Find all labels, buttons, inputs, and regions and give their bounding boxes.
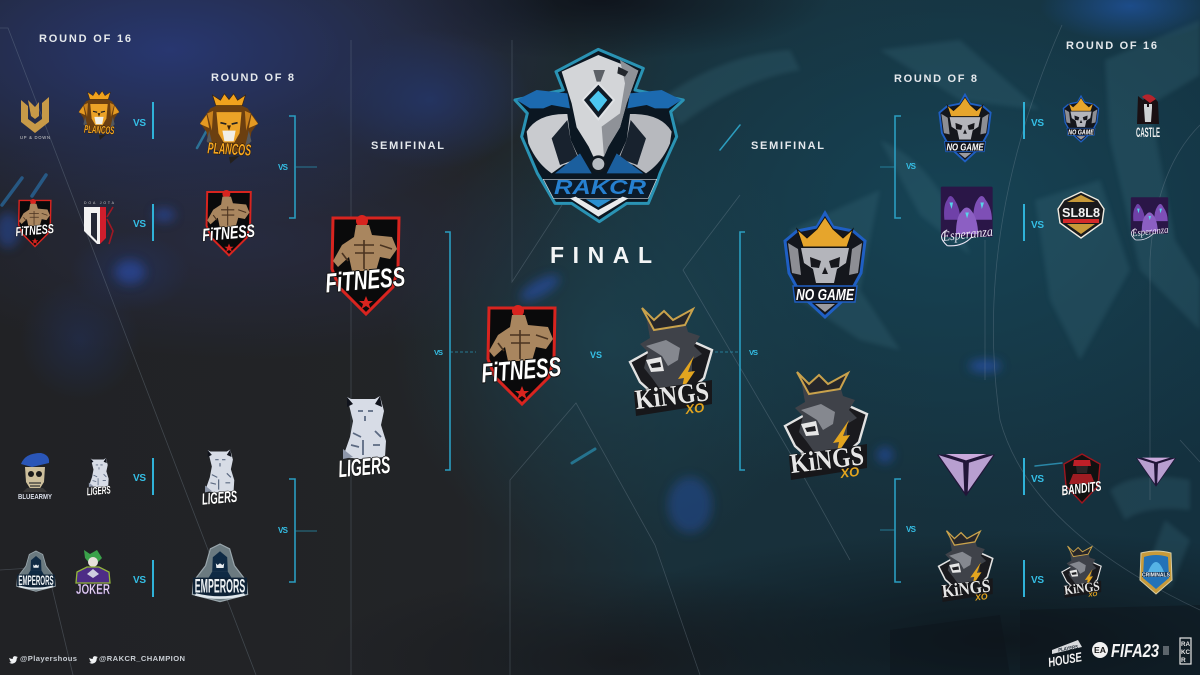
- logo: No Game semifinal: NO GAME: [796, 287, 855, 304]
- lion watermark: [660, 20, 1200, 590]
- logo: Joker: JOKER: [76, 581, 110, 598]
- round of 16 left: match 4: EMPERORS: [18, 572, 54, 588]
- round of 8 left bottom: EMPERORS: [195, 576, 245, 598]
- logo: Criminals: CRIMINALS: [1142, 572, 1171, 578]
- logo: Kings small: [1062, 546, 1101, 599]
- logo: Bandits: BANDITS: [1061, 478, 1103, 498]
- round of 8 left top: [200, 94, 317, 255]
- divider: match 2: [152, 204, 154, 241]
- round of 16 right: match 4: [1024, 546, 1172, 599]
- RAKCR wordmark: RAKCR: [554, 176, 646, 199]
- logo: Kings semifinal: KiNGS: [788, 440, 866, 480]
- logo: Bandits: [1061, 454, 1103, 503]
- round of 16 left: match 3: [18, 453, 146, 501]
- logo: Kings: KiNGS: [941, 576, 992, 601]
- vs: VS: [906, 525, 917, 534]
- logo: Players House: HOUSE: [1047, 649, 1083, 670]
- round of 16 left: match 2: [15, 199, 146, 247]
- logo: Kings semifinal: XO: [839, 464, 860, 481]
- heading: left round of 8: ROUND OF 8: [211, 72, 294, 84]
- bracket: [289, 116, 295, 218]
- bracket: [445, 232, 450, 470]
- logo: Kings: XO: [974, 591, 988, 603]
- logo: RKCR box: KC: [1181, 649, 1190, 656]
- social handles: [9, 654, 185, 664]
- bracket: [895, 116, 901, 218]
- logo: Fitness final: FiTNESS: [480, 352, 562, 388]
- logo: Ligers semifinal: [337, 396, 391, 483]
- heading: final: FINAL: [550, 242, 652, 268]
- logo: Kings: [939, 531, 993, 603]
- logo: Kings small: XO: [1087, 591, 1098, 599]
- logo: FIFA 23: EA: [1094, 646, 1106, 655]
- logo: Kings final: KiNGS: [633, 376, 711, 416]
- logo: Esperanza: Esperanza: [941, 224, 994, 244]
- heading: right round of 16: ROUND OF 16: [1066, 40, 1157, 52]
- logo: Esperanza small: [1131, 197, 1169, 240]
- logo: No Game semifinal: [785, 213, 865, 317]
- logo: Fitness final: [480, 305, 562, 404]
- logo: RKCR box: [1180, 638, 1191, 664]
- divider: match 4: [152, 560, 154, 597]
- round of 8 right top: [880, 95, 994, 246]
- logo: Fitness large: [201, 190, 256, 255]
- logo: Ligers: LIGERS: [201, 488, 238, 509]
- icon: twitter bird: [9, 656, 18, 664]
- final match: [480, 305, 712, 417]
- round of 16 right: match 3: [1024, 454, 1176, 503]
- logo: purple triangle: [937, 454, 995, 496]
- logo: Blue Army: BLUEARMY: [18, 494, 52, 501]
- semifinal right: [715, 213, 867, 481]
- round of 8 right bottom: [880, 454, 995, 603]
- handle: Playershous: @Playershous: [20, 654, 77, 663]
- icon: twitter bird: [89, 656, 98, 664]
- vs: VS: [133, 575, 146, 586]
- bracket: [740, 232, 745, 470]
- logo: FIFA 23: FIFA23: [1111, 641, 1159, 661]
- logo: Kings final: XO: [684, 400, 705, 417]
- logo: RKCR box: R: [1181, 657, 1186, 664]
- vs: VS: [278, 163, 289, 172]
- logo: Emperors: [192, 544, 248, 602]
- logo: Kings semifinal: [785, 372, 867, 481]
- bracket: [895, 479, 901, 582]
- vs: VS: [1031, 575, 1044, 586]
- vs: VS: [278, 526, 289, 535]
- sponsors: [1047, 638, 1191, 670]
- logo: Ligers: [201, 449, 238, 509]
- logo: Fitness semifinal: FiTNESS: [324, 262, 406, 298]
- semifinal left: [324, 215, 476, 483]
- round of 16 left: match 1: [20, 91, 146, 140]
- vs: VS: [1031, 474, 1044, 485]
- blue light streaks: [0, 208, 1001, 533]
- logo: Up and Down: UP & DOWN: [20, 135, 50, 140]
- vs: VS: [133, 473, 146, 484]
- logo: Ligers small: LIGERS: [86, 484, 112, 498]
- logo: Esperanza: [941, 187, 994, 246]
- logo: Fitness large: FiTNESS: [201, 221, 256, 245]
- vs: VS: [590, 350, 602, 360]
- logo: Plancos large: PLANCOS: [207, 140, 252, 160]
- logo: Fitness semifinal: [324, 215, 406, 314]
- vs: VS: [749, 348, 758, 357]
- logo: Esperanza small: Esperanza: [1131, 225, 1169, 239]
- round of 16 right: match 1: [1024, 94, 1160, 142]
- heading: left round of 16: ROUND OF 16: [39, 33, 131, 45]
- logo: RAKCR trophy: [515, 49, 683, 222]
- vs: VS: [1031, 118, 1044, 129]
- logo: Ligers semifinal: LIGERS: [337, 452, 391, 483]
- round of 16 left: match 4: [17, 550, 146, 598]
- bracket: [289, 479, 295, 582]
- logo: Fitness small: FiTNESS: [15, 221, 55, 239]
- round of 8 left bottom: [192, 449, 317, 602]
- logo: DH: DOA JOTA: [84, 201, 115, 205]
- logo: Kings small: KiNGS: [1063, 578, 1100, 598]
- handle: RAKCR: @RAKCR_CHAMPION: [99, 654, 185, 663]
- divider: match 1: [152, 102, 154, 139]
- vs: VS: [133, 118, 146, 129]
- logo: purple triangle small: [1136, 458, 1176, 487]
- logo: SL8L8: [1058, 192, 1104, 238]
- logo: SL8L8: SL8L8: [1062, 205, 1100, 220]
- logo: Kings final: [630, 308, 712, 417]
- vs: VS: [906, 162, 917, 171]
- heading: right round of 8: ROUND OF 8: [894, 73, 977, 85]
- divider: match 3: [152, 458, 154, 495]
- text: CASTLE: [1136, 124, 1160, 140]
- heading: left semifinal: SEMIFINAL: [371, 140, 444, 152]
- heading: right semifinal: SEMIFINAL: [751, 140, 824, 152]
- logo: No Game: [939, 95, 991, 161]
- vs: VS: [133, 219, 146, 230]
- bottom dark blocks: [890, 605, 1200, 675]
- logo: Criminals: [1140, 551, 1172, 594]
- logo: No Game small: NO GAME: [1068, 129, 1094, 136]
- vs: VS: [1031, 220, 1044, 231]
- logo: Players House: PLAYERS: [1058, 644, 1079, 654]
- logo: Plancos small: PLANCOS: [84, 124, 115, 137]
- vs: VS: [434, 348, 443, 357]
- logo: Players House: [1047, 640, 1083, 670]
- logo: RKCR box: RA: [1181, 641, 1190, 648]
- logo: Plancos large: [200, 94, 258, 164]
- round of 16 right: match 2: [1024, 192, 1169, 241]
- logo: No Game: NO GAME: [946, 142, 984, 153]
